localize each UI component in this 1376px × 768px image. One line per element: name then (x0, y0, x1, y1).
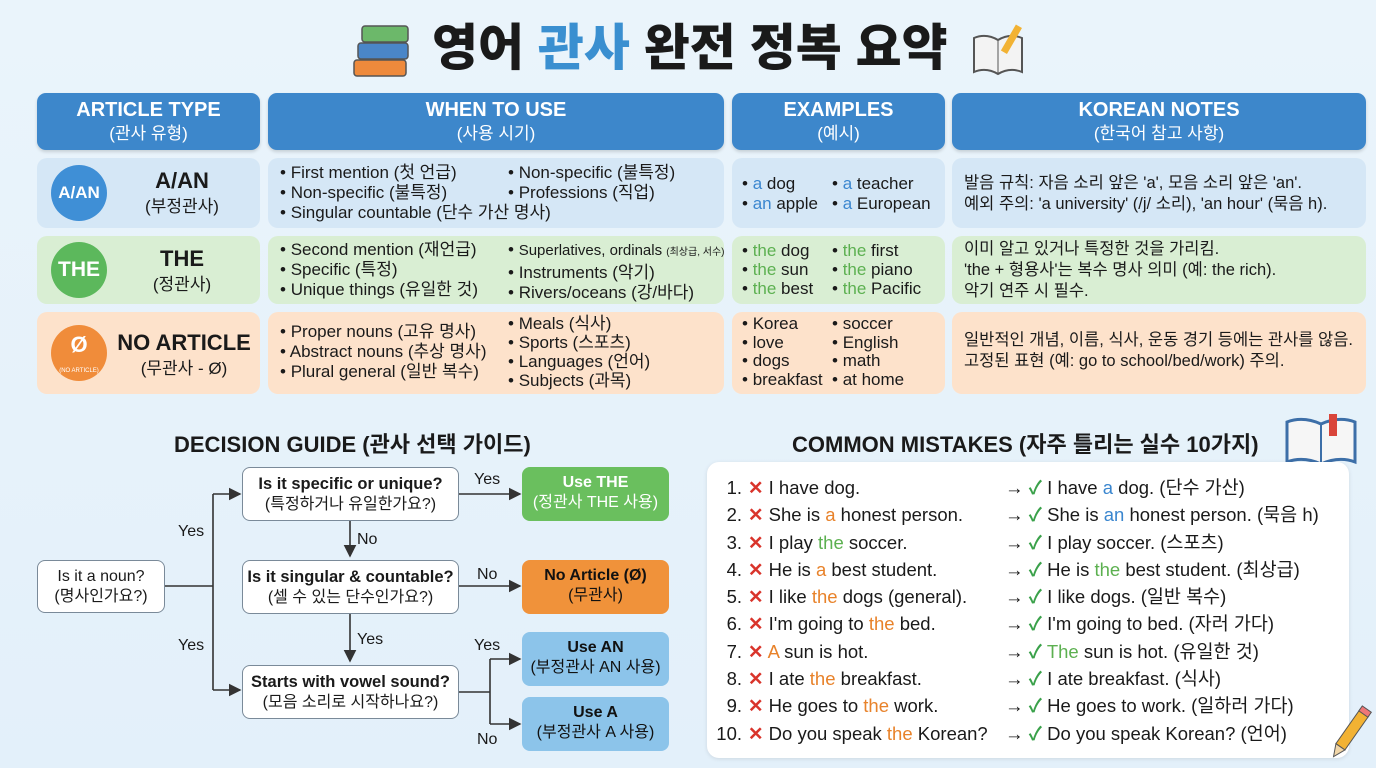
text: No (357, 531, 377, 548)
THE examples: the dog (753, 241, 809, 260)
A/AN when to use (268, 158, 724, 228)
label: THE (153, 246, 211, 294)
THE notes (952, 236, 1366, 304)
box: specific (242, 467, 459, 521)
A/AN notes: 발음 규칙: 자음 소리 앞은 'a', 모음 소리 앞은 'an'. (964, 174, 1302, 192)
A/AN when to use: Non-specific (불특정) (519, 163, 675, 182)
icon: THE circle: THE (58, 258, 100, 281)
label: THE: THE (160, 246, 204, 271)
THE examples: the sun (753, 260, 808, 279)
labels: yes/no (178, 471, 500, 748)
panel: common mistakes: ✕ I ate the breakfast. (748, 668, 922, 689)
THE examples: the best (753, 279, 813, 298)
header: examples: (예시) (817, 124, 860, 143)
A/AN examples: a European (843, 194, 931, 213)
text: Yes (178, 523, 204, 540)
icon: zero circle (51, 325, 107, 381)
panel: common mistakes: → ✓ She is an honest person. (묵음 h) (1005, 504, 1319, 525)
A/AN when to use: Professions (직업) (519, 183, 655, 202)
panel: common mistakes: ✕ She is a honest person. (748, 504, 963, 525)
THE when to use: Specific (특정) (291, 260, 398, 279)
THE when to use: Instruments (악기) (519, 263, 655, 282)
THE notes: 'the + 형용사'는 복수 명사 의미 (예: the rich). (964, 261, 1276, 279)
NO ARTICLE examples: soccer (843, 314, 893, 333)
result: no article (522, 560, 669, 614)
panel: common mistakes: → ✓ The sun is hot. (유일한 것) (1005, 641, 1259, 662)
panel: common mistakes: → ✓ I have a dog. (단수 가산) (1005, 477, 1245, 498)
panel: common mistakes: → ✓ I'm going to bed. (자러 가다) (1005, 613, 1274, 634)
header: article type: (관사 유형) (109, 124, 188, 143)
icon: open book pencil (973, 24, 1023, 76)
panel: common mistakes: ✕ I play the soccer. (748, 532, 907, 553)
box: vowel (242, 665, 459, 719)
panel: common mistakes: 9. (727, 695, 742, 716)
panel: common mistakes: 1. (727, 477, 742, 498)
A/AN examples: an apple (753, 194, 818, 213)
NO ARTICLE examples: math (843, 351, 880, 370)
panel: common mistakes: → ✓ He goes to work. (일하러 가다) (1005, 695, 1294, 716)
text: Yes (474, 471, 500, 488)
NO ARTICLE examples: love (753, 332, 784, 352)
panel: common mistakes: → ✓ He is the best student. (최상급) (1005, 559, 1300, 580)
title: 영어 관사 완전 정복 요약 (432, 20, 948, 76)
A/AN when to use: First mention (첫 언급) (291, 163, 457, 182)
result: use an: (부정관사 AN 사용) (530, 659, 661, 676)
THE examples (732, 236, 945, 304)
icon: zero circle: Ø (70, 332, 88, 357)
label: NO ARTICLE: (무관사 - Ø) (141, 359, 227, 378)
A/AN notes: 예외 주의: 'a university' (/j/ 소리), 'an hour' (묵음 h). (964, 195, 1327, 213)
box: vowel: Starts with vowel sound? (251, 673, 450, 691)
panel: common mistakes: 6. (727, 613, 742, 634)
box: is it a noun (37, 560, 165, 613)
A/AN examples: a teacher (843, 174, 914, 193)
text: No (477, 731, 497, 748)
THE examples: the piano (843, 260, 913, 279)
box: specific: Is it specific or unique? (258, 475, 443, 493)
result: use the: (정관사 THE 사용) (533, 494, 658, 511)
panel: common mistakes: → ✓ I ate breakfast. (식사) (1005, 668, 1221, 689)
icon: pencil (1332, 705, 1372, 758)
header: examples (732, 93, 945, 150)
header: examples: EXAMPLES (783, 99, 894, 121)
NO ARTICLE examples (732, 312, 945, 394)
label: A/AN: (부정관사) (145, 197, 219, 216)
heading: decision guide: DECISION GUIDE (관사 선택 가이드) (174, 432, 531, 457)
NO ARTICLE notes (952, 312, 1366, 394)
label: A/AN (145, 168, 219, 216)
result: use an (522, 632, 669, 686)
icon: books (353, 25, 409, 77)
panel: common mistakes: → ✓ Do you speak Korean? (언어) (1005, 723, 1287, 744)
box: specific: (특정하거나 유일한가요?) (265, 496, 436, 513)
A/AN when to use: Non-specific (불특정) (291, 183, 447, 202)
box: singular: (셀 수 있는 단수인가요?) (268, 589, 433, 606)
panel: common mistakes: 2. (727, 504, 742, 525)
result: use the: Use THE (563, 474, 628, 491)
result: use the (522, 467, 669, 521)
panel: common mistakes: ✕ He goes to the work. (748, 695, 938, 716)
heading: common mistakes: COMMON MISTAKES (자주 틀리는 실수 10가지) (792, 432, 1259, 457)
icon: A/AN circle (51, 165, 107, 221)
header: korean notes (952, 93, 1366, 150)
result: no article: No Article (Ø) (544, 567, 647, 584)
text: Yes (178, 637, 204, 654)
box: singular: Is it singular & countable? (247, 568, 454, 586)
NO ARTICLE when to use (268, 312, 724, 394)
connectors (165, 488, 522, 730)
NO ARTICLE when to use: Abstract nouns (추상 명사) (290, 342, 486, 361)
header: when to use: WHEN TO USE (426, 99, 566, 121)
panel: common mistakes: 4. (727, 559, 742, 580)
NO ARTICLE examples: breakfast (753, 370, 823, 388)
icon: open book (1286, 414, 1356, 464)
box: singular (242, 560, 459, 614)
THE when to use: Superlatives, ordinals (최상급, 서수) (519, 242, 724, 259)
NO ARTICLE notes: 일반적인 개념, 이름, 식사, 운동 경기 등에는 관사를 않음. (964, 331, 1353, 349)
panel: common mistakes: ✕ I'm going to the bed. (748, 613, 936, 634)
label: THE: (정관사) (153, 275, 211, 294)
NO ARTICLE when to use: Proper nouns (고유 명사) (291, 322, 476, 341)
text: No (477, 566, 497, 583)
panel: common mistakes: 7. (727, 641, 742, 662)
header: article type (37, 93, 260, 150)
row: A/AN type (37, 158, 260, 228)
NO ARTICLE notes: 고정된 표현 (예: go to school/bed/work) 주의. (964, 352, 1284, 370)
label: A/AN: A/AN (155, 168, 209, 193)
label: NO ARTICLE: NO ARTICLE (117, 330, 251, 355)
result: use an: Use AN (567, 639, 624, 656)
A/AN examples: a dog (753, 174, 795, 193)
icon: THE circle (51, 242, 107, 298)
panel: common mistakes: ✕ I like the dogs (general). (748, 586, 967, 607)
panel: common mistakes (707, 462, 1349, 758)
NO ARTICLE when to use: Sports (스포츠) (519, 333, 631, 352)
NO ARTICLE when to use: Subjects (과목) (519, 371, 631, 390)
header: when to use (268, 93, 724, 150)
NO ARTICLE when to use: Languages (언어) (519, 352, 650, 371)
NO ARTICLE examples: at home (843, 370, 904, 388)
THE examples: the first (843, 241, 898, 260)
NO ARTICLE when to use: Plural general (일반 복수) (291, 362, 479, 381)
A/AN examples (732, 158, 945, 228)
A/AN notes (952, 158, 1366, 228)
NO ARTICLE examples: dogs (753, 351, 790, 370)
THE when to use: Unique things (유일한 것) (291, 280, 478, 299)
row: NO ARTICLE type (37, 312, 260, 394)
result: no article: (무관사) (568, 587, 623, 604)
text: Yes (357, 631, 383, 648)
panel: common mistakes: ✕ He is a best student. (748, 559, 937, 580)
icon: A/AN circle: A/AN (58, 183, 100, 202)
panel: common mistakes: 5. (727, 586, 742, 607)
text: Yes (474, 637, 500, 654)
icon: zero circle: (NO ARTICLE) (59, 368, 99, 374)
box: vowel: (모음 소리로 시작하나요?) (263, 694, 438, 711)
THE when to use: Second mention (재언급) (291, 240, 477, 259)
panel: common mistakes: ✕ Do you speak the Korean? (748, 723, 988, 744)
header: article type: ARTICLE TYPE (76, 99, 221, 121)
THE examples: the Pacific (843, 279, 921, 298)
NO ARTICLE when to use: Meals (식사) (519, 314, 611, 333)
THE notes: 이미 알고 있거나 특정한 것을 가리킴. (964, 240, 1219, 258)
header: korean notes: KOREAN NOTES (1078, 99, 1240, 121)
panel: common mistakes: ✕ A sun is hot. (748, 641, 868, 662)
panel: common mistakes: → ✓ I like dogs. (일반 복수) (1005, 586, 1226, 607)
THE when to use: Rivers/oceans (강/바다) (519, 283, 694, 302)
result: use a (522, 697, 669, 751)
NO ARTICLE examples: English (843, 332, 898, 352)
row: THE type (37, 236, 260, 304)
A/AN when to use: Singular countable (단수 가산 명사) (291, 203, 551, 222)
THE notes: 악기 연주 시 필수. (964, 282, 1089, 300)
box: is it a noun: (명사인가요?) (54, 588, 148, 605)
THE when to use (268, 236, 724, 304)
panel: common mistakes: 8. (727, 668, 742, 689)
label: NO ARTICLE (117, 330, 251, 378)
panel: common mistakes: ✕ I have dog. (748, 477, 860, 498)
panel: common mistakes: → ✓ I play soccer. (스포츠) (1005, 532, 1224, 553)
NO ARTICLE examples: Korea (753, 314, 798, 333)
flowchart (165, 488, 522, 730)
panel: common mistakes: 3. (727, 532, 742, 553)
panel: common mistakes: 10. (716, 723, 742, 744)
result: use a: Use A (573, 704, 618, 721)
header: when to use: (사용 시기) (457, 124, 535, 143)
box: is it a noun: Is it a noun? (57, 568, 145, 585)
header: korean notes: (한국어 참고 사항) (1094, 124, 1224, 143)
result: use a: (부정관사 A 사용) (537, 724, 654, 741)
